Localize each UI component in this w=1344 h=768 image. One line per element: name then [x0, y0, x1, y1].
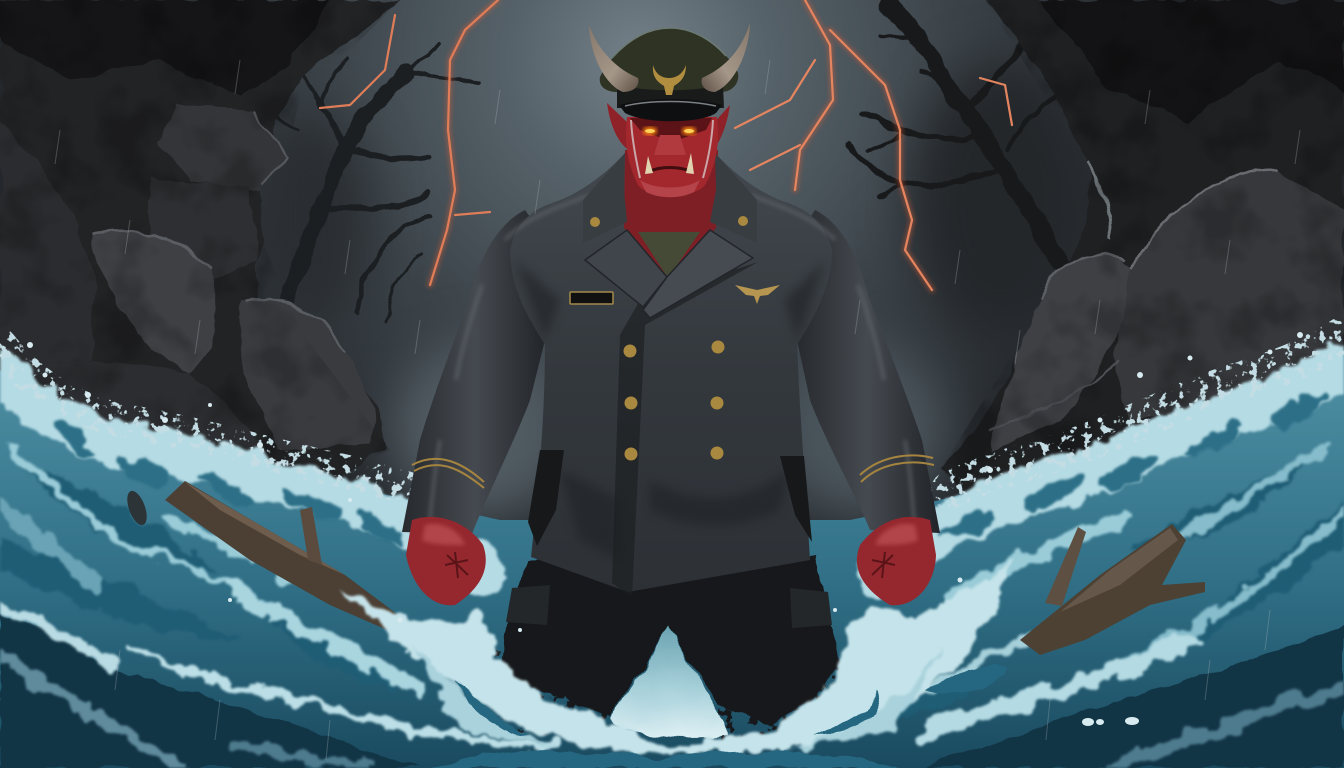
left holster — [528, 450, 564, 546]
bare tree: left — [275, 45, 478, 320]
cap crown — [600, 28, 738, 92]
visor — [619, 99, 722, 121]
fist highlights and creases — [422, 524, 918, 578]
sea: dark wave troughs — [0, 460, 1344, 722]
trousers — [498, 555, 840, 725]
torso jacket — [510, 153, 832, 592]
visor shine — [625, 102, 716, 106]
sea: foreground deep water — [0, 612, 1344, 768]
face shading — [630, 118, 713, 197]
foam: streaks across the water — [0, 445, 1344, 768]
cap crown edge — [612, 28, 726, 58]
spray droplets — [27, 332, 1303, 726]
cuff stripes — [412, 455, 934, 488]
right horn — [702, 23, 750, 92]
right arm — [794, 210, 940, 533]
mouth and fangs — [645, 153, 694, 174]
rocks: left cliff — [0, 0, 400, 490]
jacket buttons — [590, 216, 748, 460]
jacket front overlap — [612, 262, 758, 597]
driftwood: right log — [899, 524, 1205, 658]
lapel left — [585, 230, 667, 307]
shoulder and sleeve highlights — [430, 195, 914, 520]
right fist — [857, 517, 936, 605]
neck and shirt — [624, 150, 718, 280]
figure: dripping trouser hems — [490, 640, 845, 745]
foam: crest behind figure — [0, 365, 1344, 575]
jacket folds — [515, 260, 825, 560]
background haze — [250, 60, 1090, 520]
collar right — [710, 153, 757, 243]
bare tree: right — [850, 5, 1060, 265]
eyes — [643, 127, 696, 135]
collar left — [583, 153, 627, 243]
cap emblem — [653, 65, 686, 95]
pocket badge — [570, 292, 613, 304]
sea: scalloped teal patches in the foam — [49, 386, 1331, 550]
wings badge — [735, 285, 780, 304]
rocks: right cliff — [940, 0, 1344, 520]
foam: front splashes around the legs — [330, 560, 1010, 754]
left fist — [406, 517, 486, 605]
head — [626, 117, 718, 196]
lapel right — [643, 230, 753, 318]
foam: spray over rocks — [0, 335, 1344, 496]
water between the legs — [612, 625, 728, 738]
cap — [589, 23, 750, 121]
lightning: left bolt — [320, 0, 498, 285]
lightning: right bolts — [735, 0, 1012, 290]
right holster — [780, 456, 812, 542]
ears — [607, 103, 730, 152]
left horn — [589, 25, 638, 92]
sea: main water — [0, 350, 1344, 768]
sea: central wave troughs — [430, 665, 1010, 768]
driftwood: left log — [123, 481, 425, 640]
figure: demon officer — [402, 23, 940, 725]
cap band — [617, 85, 724, 108]
left arm — [402, 210, 548, 534]
cargo pockets — [506, 585, 832, 628]
